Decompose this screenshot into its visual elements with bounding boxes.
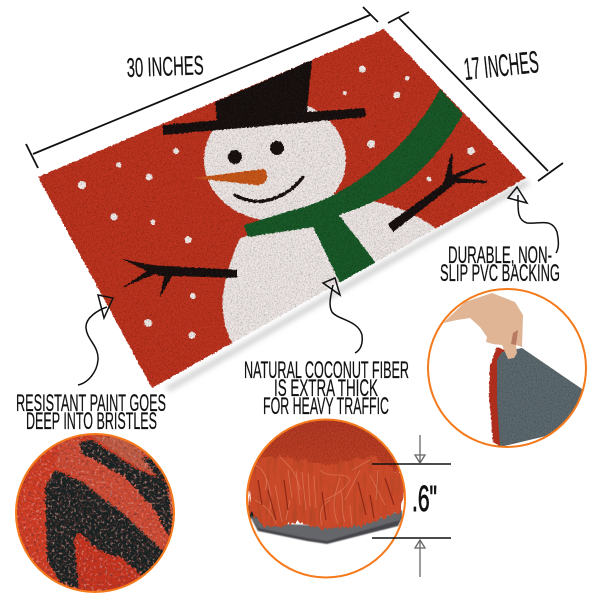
label: coconut fiber: FOR HEAVY TRAFFIC <box>263 393 389 420</box>
label: coconut fiber: IS EXTRA THICK <box>274 375 378 402</box>
pointer: coconut fiber <box>323 278 362 353</box>
carrot nose <box>193 169 267 185</box>
30 inches dimension line <box>26 7 378 168</box>
snowman body <box>223 201 440 343</box>
arrow up <box>415 540 425 577</box>
label: coconut fiber: NATURAL COCONUT FIBER <box>244 357 409 384</box>
pointer: resistant paint <box>78 295 113 385</box>
snow dots <box>78 66 475 338</box>
left eye <box>228 150 242 164</box>
top hat <box>163 60 366 135</box>
label: resistant paint: DEEP INTO BRISTLES <box>26 408 157 435</box>
snowman doormat <box>38 29 526 388</box>
lower red wedge <box>74 532 142 592</box>
dark streak <box>142 457 167 480</box>
doormat shadow <box>165 180 530 391</box>
hand <box>443 293 523 359</box>
circle: paint close-up <box>15 433 175 593</box>
left arm <box>122 259 237 297</box>
right eye <box>270 141 284 155</box>
dark fiber gaps <box>258 478 394 520</box>
mat background <box>38 29 526 388</box>
circle: fiber thickness close-up <box>247 420 405 578</box>
label: resistant paint: RESISTANT PAINT GOES <box>16 390 166 417</box>
thickness bottom line <box>372 537 451 539</box>
gray mat flap <box>497 348 582 446</box>
light fiber strands <box>255 457 385 525</box>
finger shadow <box>511 330 518 345</box>
right salmon wedge <box>166 488 173 524</box>
scarf <box>244 89 463 283</box>
right arm <box>388 154 487 232</box>
arrow down <box>415 435 425 463</box>
snowman head <box>204 99 346 221</box>
smile <box>235 177 303 201</box>
label: 30 inches: 30 INCHES <box>126 50 204 83</box>
pointer: durable backing <box>508 187 558 253</box>
top salmon region <box>92 435 157 476</box>
dark shadow under fibers <box>248 505 258 519</box>
dark triangle <box>45 470 165 590</box>
thickness top line <box>372 463 451 465</box>
17 inches dimension line <box>388 12 563 181</box>
gray backing <box>250 510 402 544</box>
circle: backing close-up <box>428 289 592 448</box>
label: .6 inch: .6" <box>412 478 437 519</box>
top pile <box>258 420 400 472</box>
middle salmon band <box>55 440 170 553</box>
dark upper band <box>79 440 172 537</box>
red mat edge <box>489 347 505 448</box>
fibers <box>247 456 405 529</box>
